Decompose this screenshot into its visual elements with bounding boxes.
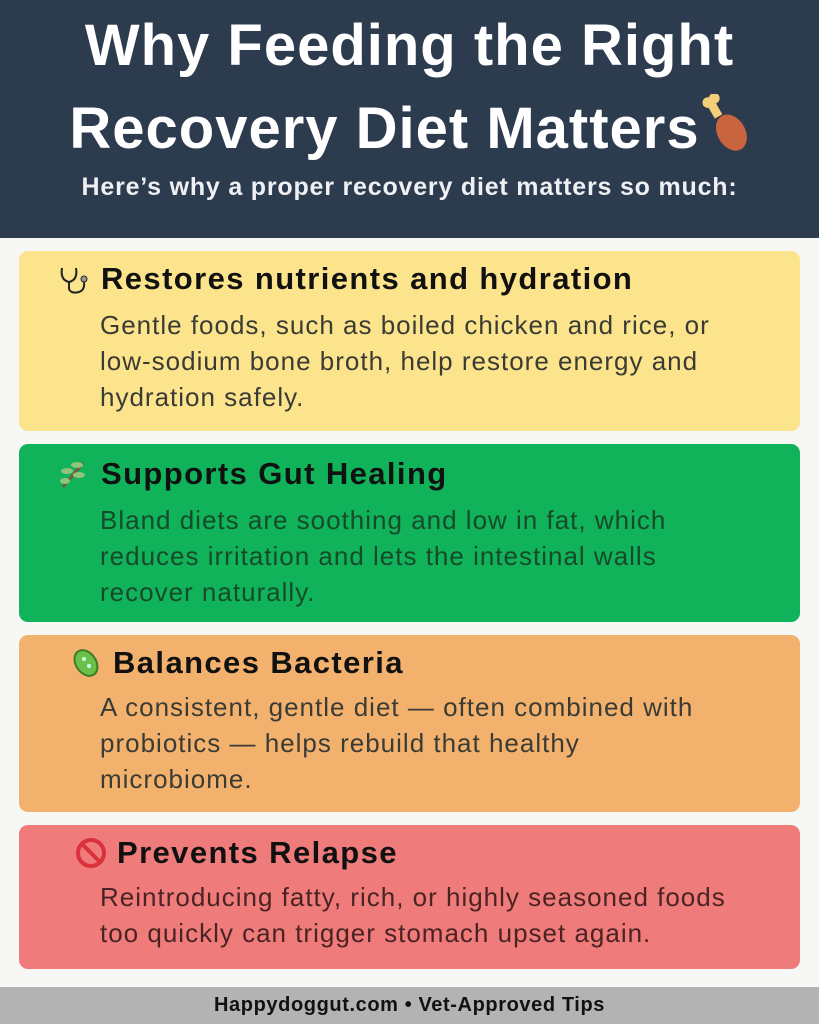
body: Bland diets are soothing and low in fat, which <box>100 505 666 535</box>
heading: Restores nutrients and hydration <box>101 261 633 296</box>
body: reduces irritation and lets the intestinal walls <box>100 541 657 571</box>
panel: balances bacteria <box>19 635 800 812</box>
body: too quickly can trigger stomach upset again. <box>100 918 651 948</box>
panel: prevents relapse <box>19 825 800 969</box>
heading: Supports Gut Healing <box>101 456 448 491</box>
panel: gut healing <box>19 444 800 622</box>
body: recover naturally. <box>100 577 316 607</box>
body: A consistent, gentle diet — often combined with <box>100 692 693 722</box>
body: microbiome. <box>100 764 253 794</box>
title line 2: Recovery Diet Matters <box>69 96 700 161</box>
body: hydration safely. <box>100 382 304 412</box>
footer <box>0 987 819 1024</box>
body <box>100 310 710 412</box>
header <box>0 0 819 238</box>
body: low-sodium bone broth, help restore energy and <box>100 346 698 376</box>
body: Gentle foods, such as boiled chicken and rice, or <box>100 310 710 340</box>
body <box>100 505 666 607</box>
heading: Balances Bacteria <box>113 645 404 680</box>
body: Reintroducing fatty, rich, or highly seasoned foods <box>100 882 726 912</box>
footer: Happydoggut.com • Vet-Approved Tips <box>214 994 605 1016</box>
panel: restores nutrients <box>19 251 800 431</box>
subtitle: Here’s why a proper recovery diet matters so much: <box>82 173 737 201</box>
body <box>100 882 726 948</box>
body: probiotics — helps rebuild that healthy <box>100 728 580 758</box>
heading: Prevents Relapse <box>117 835 398 870</box>
body <box>100 692 693 794</box>
title line 1: Why Feeding the Right <box>85 13 734 78</box>
